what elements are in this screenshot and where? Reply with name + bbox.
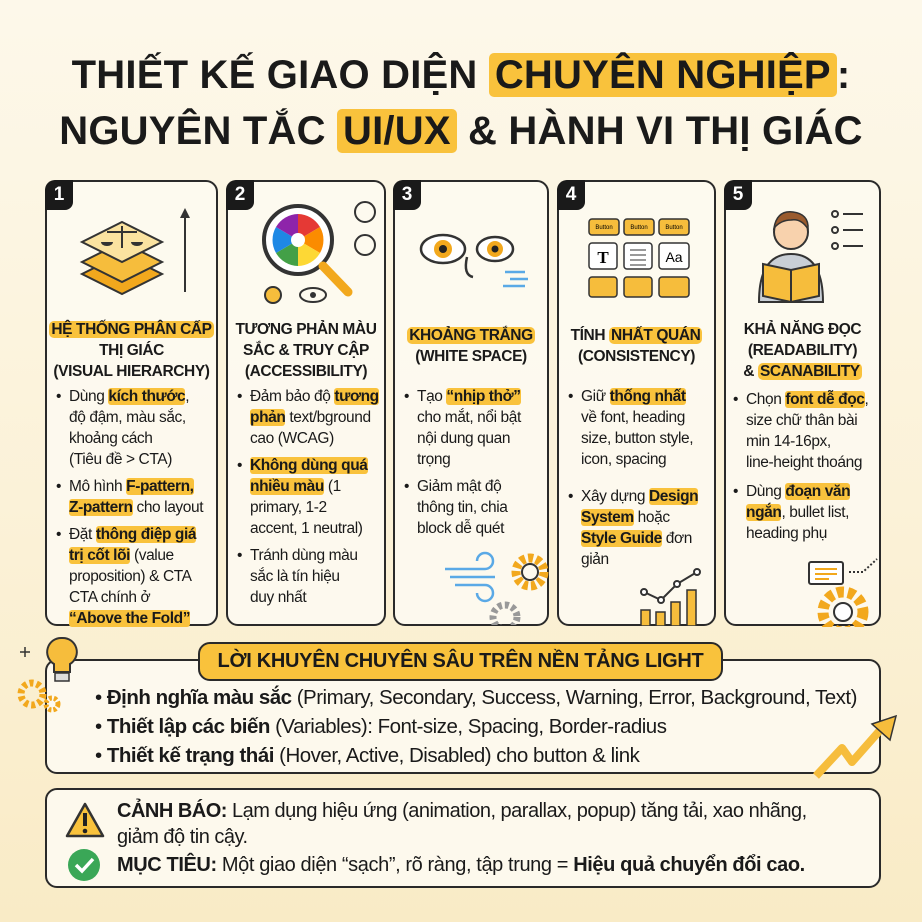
bullets: thông tin, chia [417, 499, 508, 516]
panel: readability [724, 180, 881, 626]
title [59, 52, 863, 153]
bullets: cao (WCAG) [250, 430, 334, 447]
bullets: CTA chính ở [69, 589, 150, 606]
warning text [117, 798, 807, 848]
bullets: giản [581, 551, 609, 568]
badge 1 [45, 180, 73, 210]
bullets: độ đậm, màu sắc, [69, 409, 186, 426]
icon: UI component grid: Button [665, 225, 683, 231]
warning text: CẢNH BÁO: Lạm dụng hiệu ứng (animation, parallax, popup) tăng tải, xao nhãng, [117, 800, 807, 822]
bullets: line-height thoáng [746, 454, 862, 471]
bullets: Dùng đoạn văn [746, 483, 850, 500]
bullets: cho mắt, nổi bật [417, 409, 521, 426]
heading: THỊ GIÁC [99, 342, 164, 359]
heading: SẮC & TRUY CẬP [243, 342, 369, 359]
bullets [734, 390, 868, 542]
icon: warning triangle [66, 802, 104, 838]
badge 5 [724, 180, 752, 210]
heading: TÍNH NHẤT QUÁN [571, 327, 700, 344]
tips header pill [198, 642, 723, 681]
bullets: proposition) & CTA [69, 568, 192, 585]
bullets: nội dung quan [417, 430, 510, 447]
bullets: System hoặc [581, 509, 670, 526]
icon: UI component grid: T [597, 248, 609, 267]
tips list: • Thiết lập các biến (Variables): Font-size, Spacing, Border-radius [95, 715, 666, 738]
badge 1: 1 [54, 184, 64, 205]
bullets: Dùng kích thước, [69, 388, 189, 405]
bullets: Đảm bảo độ tương [250, 388, 379, 405]
bullets: size chữ thân bài [746, 412, 857, 429]
heading: HỆ THỐNG PHÂN CẤP [51, 321, 212, 338]
icon: UI component grid [588, 218, 690, 298]
icon: person reading [758, 210, 863, 303]
bullets: Giảm mật độ [417, 478, 501, 495]
heading [235, 320, 377, 380]
bullets: về font, heading [581, 409, 685, 426]
bullets: (Tiêu đề > CTA) [69, 451, 172, 468]
heading: TƯƠNG PHẢN MÀU [235, 321, 377, 338]
heading: KHOẢNG TRẮNG [409, 327, 533, 344]
bullets: size, button style, [581, 430, 693, 447]
icon: layers with scales [80, 208, 190, 296]
panel: warning and goal [45, 788, 881, 888]
bullets [238, 388, 379, 606]
icon: lightbulb with gears [18, 637, 78, 712]
icon: wind and gears [445, 552, 548, 625]
bullets: icon, spacing [581, 451, 666, 468]
bullets [404, 388, 522, 537]
icon: color wheel magnifier [262, 201, 376, 304]
badge 5: 5 [733, 184, 743, 205]
bullets: khoảng cách [69, 430, 152, 447]
badge 4 [557, 180, 585, 210]
bullets: accent, 1 neutral) [250, 520, 363, 537]
bullets: sắc là tín hiệu [250, 568, 340, 585]
heading: (CONSISTENCY) [578, 348, 695, 365]
tips list: • Thiết kế trạng thái (Hover, Active, Disabled) cho button & link [95, 744, 639, 767]
bullets: trọng [417, 451, 450, 468]
bullets: block dễ quét [417, 520, 504, 537]
icon: check circle [68, 849, 100, 881]
icon: face eyes [420, 234, 528, 288]
badge 2: 2 [235, 184, 245, 205]
heading: (READABILITY) [748, 342, 857, 359]
tips header pill: LỜI KHUYÊN CHUYÊN SÂU TRÊN NỀN TẢNG LIGHT [218, 650, 703, 672]
tips list [95, 686, 857, 767]
goal text: MỤC TIÊU: Một giao diện “sạch”, rõ ràng, tập trung = Hiệu quả chuyển đổi cao. [117, 854, 805, 876]
panel: expert tips [45, 659, 881, 774]
bullets: Không dùng quá [250, 457, 368, 474]
icon: UI component grid: Button [630, 225, 648, 231]
panel: consistency [557, 180, 716, 626]
badge 4: 4 [566, 184, 576, 205]
bullets: min 14-16px, [746, 433, 831, 450]
panel: visual hierarchy [45, 180, 218, 626]
heading: (VISUAL HIERARCHY) [53, 363, 210, 380]
panel: white space [393, 180, 549, 626]
bullets: Giữ thống nhất [581, 388, 686, 405]
bullets [56, 388, 204, 627]
heading [49, 320, 214, 380]
bullets: trị cốt lõi (value [69, 547, 174, 564]
bullets: Style Guide đơn [581, 530, 692, 547]
bullets: “Above the Fold” [69, 610, 190, 627]
bullets: ngắn, bullet list, [746, 504, 849, 521]
badge 3 [393, 180, 421, 210]
bullets: duy nhất [250, 589, 306, 606]
bullets: Tạo “nhịp thở” [417, 388, 521, 405]
heading [570, 326, 702, 365]
heading [407, 326, 535, 365]
icon: growth chart [640, 568, 701, 626]
bullets [568, 388, 698, 568]
bullets: phản text/bground [250, 409, 371, 426]
bullets: Mô hình F-pattern, [69, 478, 194, 495]
bullets: nhiều màu (1 [250, 478, 341, 495]
bullets: heading phụ [746, 525, 827, 542]
heading: KHẢ NĂNG ĐỌC [744, 321, 861, 338]
heading: (ACCESSIBILITY) [245, 363, 367, 380]
icon: UI component grid: Aa [665, 249, 683, 265]
icon: doc and gear [808, 558, 878, 627]
heading [743, 320, 862, 380]
panel: contrast & accessibility [226, 180, 386, 626]
bullets: Đặt thông điệp giá [69, 526, 196, 543]
heading: (WHITE SPACE) [415, 348, 527, 365]
bullets: Chọn font dễ đọc, [746, 391, 868, 408]
title: NGUYÊN TẮC UI/UX & HÀNH VI THỊ GIÁC [59, 109, 863, 153]
title: THIẾT KẾ GIAO DIỆN CHUYÊN NGHIỆP: [72, 53, 850, 97]
bullets: Z-pattern cho layout [69, 499, 203, 516]
icon: UI component grid: Button [595, 225, 613, 231]
bullets: Xây dựng Design [581, 488, 698, 505]
bullets: primary, 1-2 [250, 499, 327, 516]
icon: upward arrow [813, 714, 897, 779]
badge 3: 3 [402, 184, 412, 205]
tips list: • Định nghĩa màu sắc (Primary, Secondary, Success, Warning, Error, Background, Text) [95, 686, 857, 709]
badge 2 [226, 180, 254, 210]
heading: & SCANABILITY [743, 363, 860, 380]
bullets: Tránh dùng màu [250, 547, 358, 564]
warning text: giảm độ tin cậy. [117, 826, 248, 848]
